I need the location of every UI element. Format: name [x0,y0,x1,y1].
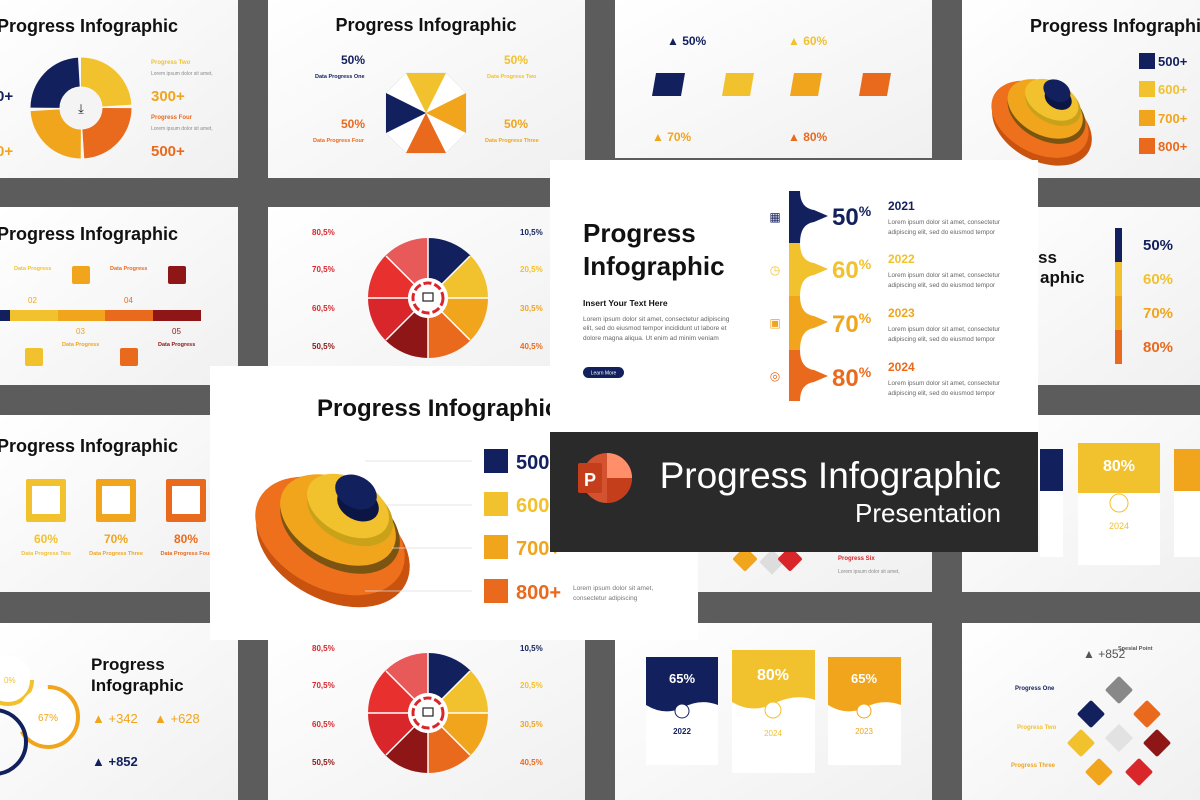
slide: main vertical timeline [550,160,1038,432]
text: progress values: Lorem ipsum dolor sit amet, [151,71,213,77]
text block: dolore magna aliqua. Ut enim ad minim veniam [583,335,719,342]
title banner [550,432,1038,552]
stats: Data Progress Four [313,138,365,144]
stats: 50% [504,117,528,131]
stats: ▲ +852 [92,754,138,769]
card 2022: 65% [669,671,695,686]
list: 500+ [516,452,561,474]
pie chart [368,653,488,773]
slide: pie chart (row4 col2): 50,5% [312,758,335,767]
percentages & years [832,199,1000,397]
slide: cards (row3 col4): 2024 [1109,521,1129,531]
timeline: ▣ [769,316,781,330]
donut chart [45,72,117,144]
list: 600+ [516,495,561,517]
button [583,367,624,378]
heading: Progress [91,655,165,674]
timeline: ◷ [770,263,780,277]
slide: vertical timeline small (row2 col4) [962,207,1200,385]
text: progress values: 500+ [151,143,185,160]
labels: 70,5% [312,265,335,274]
slide: cards (row3 col4): 80% [1103,458,1135,475]
stats: 50% [341,53,365,67]
slide: pie chart (row4 col2) [268,623,585,800]
card 2023: 2023 [855,727,873,736]
labels: 80,5% [312,228,335,237]
slide: pie chart (row4 col2): 20,5% [520,681,543,690]
slide: 3D disc overlay: Lorem ipsum dolor sit amet, [573,585,653,592]
banner subtitle: Presentation [855,498,1001,528]
timeline bar: Data Progress [158,342,195,348]
stats: ▲ 70% [652,130,692,144]
squares: Data Progress Four [160,551,212,557]
slide: octagon (row1 col2) [268,0,585,178]
heading: Progress Infographic [0,16,178,36]
timeline bar: 04 [124,296,133,305]
timeline [769,191,828,401]
slide: pie chart (row2 col2) [268,207,585,385]
card 2023 [828,657,901,765]
text block [583,298,730,342]
list: 500+ [1158,54,1188,69]
percentages & years: adipiscing elit, sed do eiusmod tempor [888,282,995,289]
slide: diamond grid (row4 col4): Progress One [1015,686,1055,692]
labels: 60,5% [312,304,335,313]
percentages & years: % [859,203,872,219]
card 2022: 2022 [673,727,691,736]
timeline bar [0,266,201,366]
percentages & years: adipiscing elit, sed do eiusmod tempor [888,229,995,236]
squares: Data Progress Two [21,551,71,557]
stats: ▲ +342 [92,711,138,726]
labels: 20,5% [520,265,543,274]
percentages & years: Lorem ipsum dolor sit amet, consectetur [888,326,1000,333]
timeline bar: 02 [28,296,37,305]
slide: cards (row3 col4) [962,415,1200,592]
card 2024: 80% [757,667,789,684]
percentages & years: 70 [832,311,859,338]
heading: Progress Infographic [335,15,517,35]
slide: diamond grid (row4 col4) [962,623,1200,800]
stats [313,53,539,144]
percentages & years: adipiscing elit, sed do eiusmod tempor [888,336,995,343]
slide: diamonds (row3 col3, partial) [615,415,932,592]
slide: 3D disc (row1 col4) [962,0,1200,182]
slide: pie chart (row4 col2): 30,5% [520,720,543,729]
slide: pie chart (row4 col2): 70,5% [312,681,335,690]
percentages & years: % [859,310,872,326]
stats: Data Progress One [315,74,365,80]
percentages & years: Lorem ipsum dolor sit amet, consectetur [888,272,1000,279]
text block: Lorem ipsum dolor sit amet, consectetur adipiscing [583,316,730,323]
stats: ▲ 60% [788,34,828,48]
text: progress values [0,60,213,160]
slide: vertical timeline small (row2 col4): 50% [1143,237,1173,254]
percentages & years: Lorem ipsum dolor sit amet, consectetur [888,219,1000,226]
slide: diamonds (row3 col3, partial): Lorem ipsum dolor sit amet, [838,569,900,575]
list: 600+ [1158,82,1188,97]
slide: pie chart (row4 col2): 40,5% [520,758,543,767]
percentages & years: % [859,364,872,380]
slide: pie chart (row4 col2): 10,5% [520,644,543,653]
heading: Progress [583,218,696,248]
icon: powerpoint logo: P [584,470,596,490]
slide: vertical timeline small (row2 col4): 60% [1143,271,1173,288]
slide: rings (row4 col1): 0% [4,676,16,685]
heading: Progress Infographic [0,436,178,456]
disc chart [978,65,1105,182]
list: 800+ [516,582,561,604]
slide: 3D disc overlay [210,366,698,640]
button: Learn More [591,370,616,376]
ring charts [0,656,78,774]
labels: 40,5% [520,342,543,351]
stats: 50% [504,53,528,67]
timeline bar: Data Progress [62,342,99,348]
timeline bar: Data Progress [14,266,51,272]
stats [652,34,828,144]
octagon chart [386,73,466,153]
labels [312,228,543,351]
slide: icon squares (row3 col1) [0,415,238,592]
card 2023: 65% [851,671,877,686]
slide: diamond grid (row4 col4): Progress Three [1011,763,1056,769]
slide: diamond grid (row4 col4): Progress Two [1017,725,1057,731]
slide: diamond grid (row4 col4): ▲ +852 [1083,647,1126,661]
percentages & years: 2021 [888,199,915,213]
list: 800+ [1158,139,1188,154]
squares: 70% [104,532,128,546]
stats: Data Progress Two [487,74,537,80]
connector lines [365,461,472,591]
stats [92,711,200,769]
slide: donut chart (row1 col1) [0,0,238,178]
squares: Data Progress Three [89,551,143,557]
card 2022 [646,657,718,765]
step blocks [652,73,891,96]
text: progress values: Progress Four [151,115,193,121]
donut chart: ⤓ [78,101,84,116]
stats: ▲ +628 [154,711,200,726]
slide: pie chart (row4 col2): 80,5% [312,644,335,653]
timeline: ◎ [770,369,780,383]
timeline: ▦ [769,210,781,224]
heading: Progress Infographic [0,224,178,244]
labels: 30,5% [520,304,543,313]
slide: percentage cards (row4 col3) [615,623,932,800]
labels: 50,5% [312,342,335,351]
squares: 80% [174,532,198,546]
heading: Progress Infographic [317,395,558,422]
list: 700+ [516,538,561,560]
percentages & years: adipiscing elit, sed do eiusmod tempor [888,390,995,397]
icon: powerpoint logo [578,453,632,503]
percentages & years: 2024 [888,360,915,374]
squares [21,479,212,557]
pie chart [368,238,488,358]
list [1139,53,1188,154]
slide: 3D disc overlay: consectetur adipiscing [573,595,638,602]
slide: main vertical timeline: Infographic [583,251,725,281]
list [484,449,561,604]
percentages & years: 2022 [888,252,915,266]
card 2024 [732,650,815,773]
text block: Insert Your Text Here [583,298,668,308]
text block: elit, sed do eiusmod tempor incididunt ut labore et [583,325,727,332]
timeline bar: 05 [172,327,181,336]
slide: vertical timeline small (row2 col4): 80% [1143,339,1173,356]
slide: timeline (row2 col1) [0,207,238,385]
percentages & years: Lorem ipsum dolor sit amet, consectetur [888,380,1000,387]
disc chart [235,453,431,632]
banner title: Progress Infographic [660,455,1001,496]
text: progress values: 300+ [151,88,185,105]
slide: vertical timeline small (row2 col4): 70% [1143,305,1173,322]
timeline bar: 03 [76,327,85,336]
squares: 60% [34,532,58,546]
slide: rings (row4 col1) [0,623,238,800]
percentages & years: 2023 [888,306,915,320]
stats: Data Progress Three [485,138,539,144]
slide: pie chart (row4 col2): 60,5% [312,720,335,729]
labels: 10,5% [520,228,543,237]
card 2024: 2024 [764,729,782,738]
text: progress values: Lorem ipsum dolor sit amet, [151,126,213,132]
text: progress values: Progress Two [151,60,191,66]
slide: diamonds (row3 col3, partial): Progress Six [838,556,875,562]
percentages & years: 60 [832,257,859,284]
slide: vertical timeline small (row2 col4): ss [1038,248,1057,267]
timeline bar: Data Progress [110,266,147,272]
slide: diamond grid (row4 col4): Spesial Point [1118,646,1153,652]
percentages & years: % [859,256,872,272]
slide: vertical timeline small (row2 col4): aphic [1040,268,1084,287]
slide: rings (row4 col1): Infographic [91,676,184,695]
list: 700+ [1158,111,1188,126]
percentages & years: 80 [832,365,859,392]
percentages & years: 50 [832,204,859,231]
stats: 50% [341,117,365,131]
stats: ▲ 80% [788,130,828,144]
slide: rings (row4 col1): 67% [38,713,58,724]
stats: ▲ 50% [667,34,707,48]
slide: process steps (row1 col3) [615,0,932,158]
